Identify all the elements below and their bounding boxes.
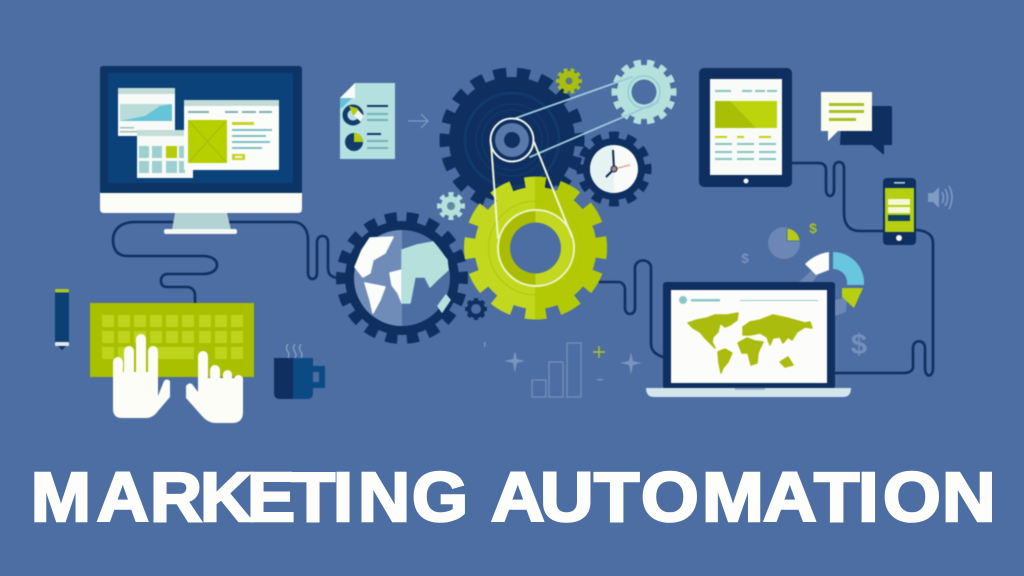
small pie bbox=[768, 227, 800, 259]
donut chart bbox=[799, 252, 864, 316]
arrow bbox=[408, 114, 428, 128]
speech bubbles bbox=[821, 92, 892, 155]
lime dollar: $ bbox=[809, 220, 817, 236]
dark main gear bbox=[445, 73, 579, 207]
left hand bbox=[113, 334, 170, 418]
small lime gear bbox=[558, 70, 580, 92]
laptop bbox=[646, 282, 851, 397]
coffee mug bbox=[274, 344, 325, 399]
illustration bbox=[55, 63, 952, 423]
title: AUTOMATION bbox=[491, 459, 996, 536]
dark small gear bbox=[468, 300, 484, 318]
world map bbox=[688, 313, 812, 373]
window: chart bbox=[118, 88, 175, 136]
lime gear bbox=[470, 183, 600, 313]
monitor bbox=[100, 66, 302, 234]
pale small gear bbox=[440, 194, 462, 218]
clock gear bbox=[581, 136, 647, 202]
pale dollar: $ bbox=[741, 250, 749, 266]
right hand bbox=[186, 351, 243, 423]
tablet bbox=[699, 68, 792, 187]
document icon bbox=[340, 83, 395, 159]
continents bbox=[355, 237, 450, 313]
globe gear bbox=[341, 217, 463, 339]
cables bbox=[113, 162, 933, 376]
phone bbox=[883, 178, 916, 245]
sparkles bbox=[484, 342, 642, 380]
large dollar: $ bbox=[851, 329, 867, 361]
window: thumbnails bbox=[137, 130, 193, 178]
title: MARKETING bbox=[31, 459, 468, 537]
keyboard bbox=[90, 303, 254, 377]
window: article bbox=[184, 100, 279, 170]
title bbox=[31, 459, 996, 537]
faded bar chart bbox=[532, 343, 581, 397]
speaker icon bbox=[928, 186, 952, 209]
pen bbox=[55, 289, 69, 350]
pale gear bbox=[615, 63, 673, 121]
belts bbox=[490, 77, 658, 286]
infographic canvas bbox=[34, 59, 992, 523]
